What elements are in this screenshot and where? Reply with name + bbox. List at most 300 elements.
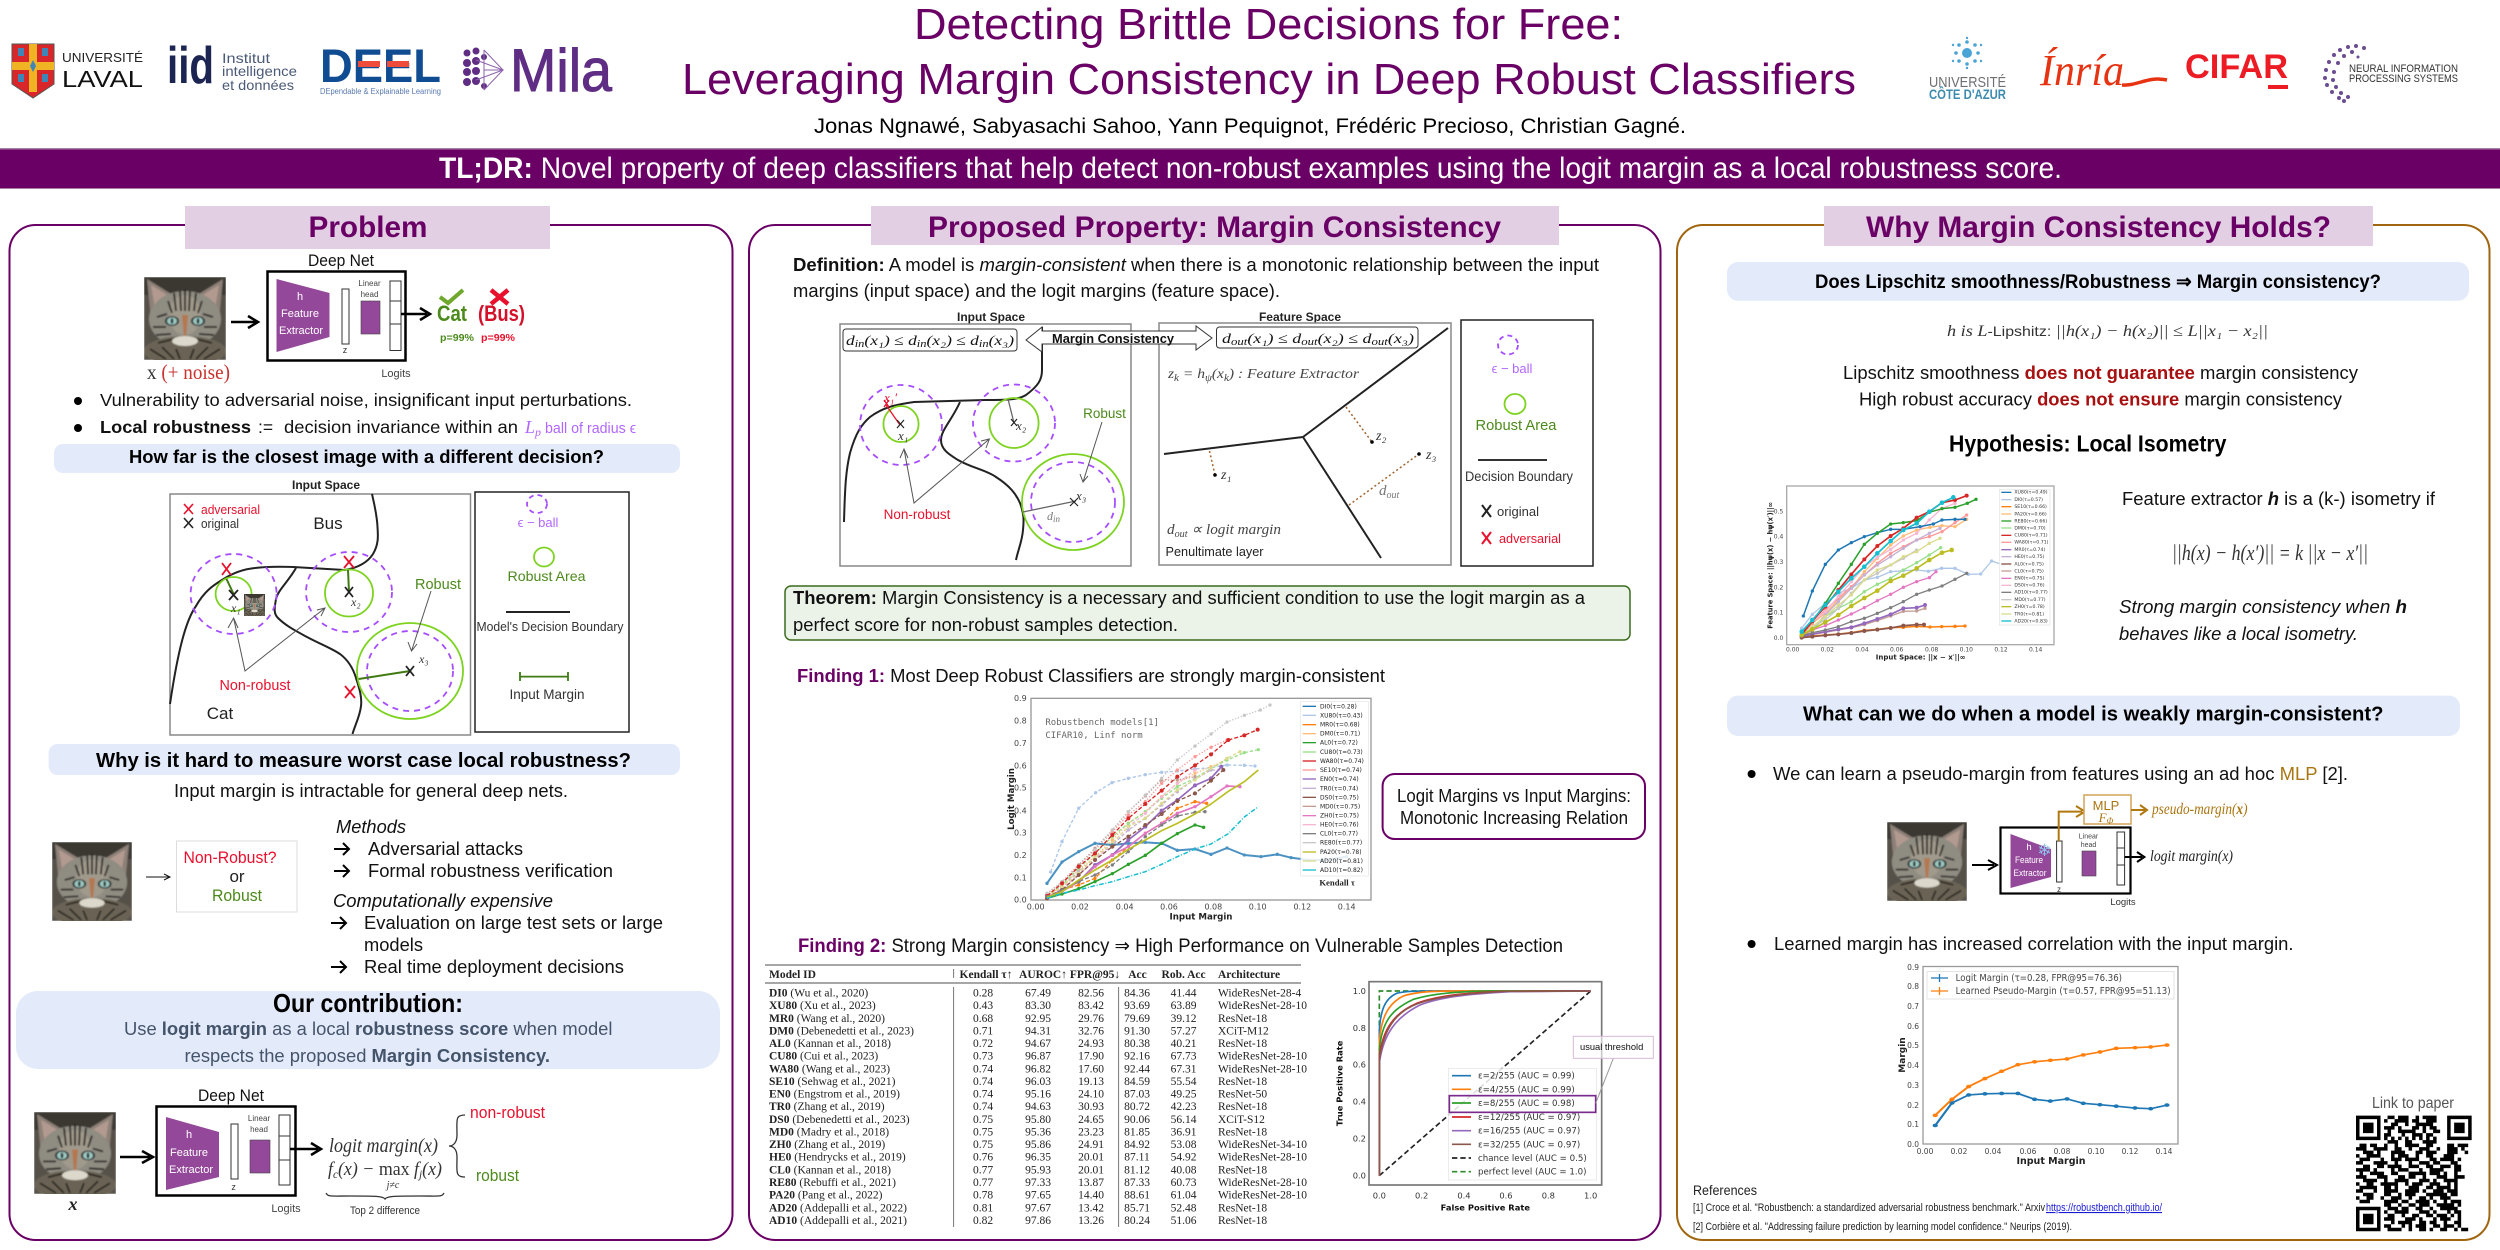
- icon: check: [440, 290, 463, 303]
- logo: Université Côte d'Azur: [1929, 37, 2006, 102]
- diagram: logit margin as score: (x): [422, 1159, 442, 1180]
- table rows: WideResNet-28-10: [1218, 1152, 1307, 1164]
- logo: Institut intelligence et données: iid: [167, 37, 214, 95]
- chart: learned pseudo-margin: Learned Pseudo-Margin (τ=0.57, FPR@95=51.13): [1956, 986, 2171, 997]
- box: non-robust or robust: Robust: [212, 886, 262, 905]
- table rows: 0.74: [973, 1076, 993, 1088]
- table rows: 92.95: [1025, 1013, 1051, 1025]
- diagram: feature space: out: [1175, 529, 1188, 540]
- table rows: RE80 (Rebuffi et al., 2021): [769, 1177, 896, 1189]
- diagram: pseudo-margin MLP: Extractor: [2014, 868, 2046, 879]
- image: noisy cat: [144, 277, 226, 366]
- chart: learned pseudo-margin: 0.9: [1907, 963, 1919, 972]
- callout: our contribution: [16, 988, 720, 1069]
- question pill: worst case: Why is it hard to measure worst case local robustness?: [96, 750, 631, 772]
- list: methods and costs: Formal robustness verification: [368, 861, 613, 881]
- diagram: input space: Input Space: [292, 478, 360, 492]
- heading: Why Margin Consistency Holds?: Why Margin Consistency Holds?: [1866, 211, 2331, 244]
- table rows: 57.27: [1171, 1025, 1197, 1037]
- table rows: 67.73: [1171, 1051, 1197, 1063]
- chart: logit margin vs input margin: HE0(τ=0.76): [1320, 822, 1359, 829]
- table header: FPR@95↓: [1070, 969, 1120, 981]
- image: cat: [52, 842, 132, 927]
- diagram: pseudo-margin MLP: head: [2081, 842, 2096, 849]
- chart: feature space vs input space: SE10(τ=0.66): [2014, 504, 2047, 510]
- chart: logit margin vs input margin: Robustbench models[1]: [1045, 718, 1159, 728]
- callout: monotonic relation: Logit Margins vs Input Margins:: [1397, 786, 1631, 806]
- diagram: pseudo-margin MLP: [1887, 795, 2248, 908]
- chart: feature space vs input space: 0.06: [1890, 646, 1904, 653]
- diagram: input space: Robust: [415, 577, 461, 593]
- table rows: AL0 (Kannan et al., 2018): [769, 1038, 891, 1050]
- diagram: pseudo-margin MLP: pseudo-margin(x): [2151, 801, 2248, 818]
- table rows: SE10 (Sehwag et al., 2021): [769, 1076, 896, 1088]
- table rows: 83.30: [1025, 1000, 1051, 1012]
- network box: Linear: [358, 279, 381, 288]
- diagram: logit margin as score: logit margin(x): [329, 1135, 438, 1157]
- references: [2] Corbière et al. "Addressing failure prediction by learning model confidence." Neurips (2019).: [1693, 1221, 2072, 1233]
- table rows: 20.01: [1078, 1152, 1104, 1164]
- table rows: 96.03: [1025, 1076, 1051, 1088]
- chart: feature space vs input space: AD20(τ=0.83): [2014, 618, 2048, 624]
- chart: ROC curves: 0.8: [1542, 1190, 1555, 1200]
- list: methods and costs: Real time deployment decisions: [364, 957, 624, 977]
- link to paper label: Link to paper: [2372, 1095, 2455, 1112]
- chart: ROC curves: usual threshold: [1580, 1042, 1643, 1052]
- table rows: 0.75: [973, 1126, 993, 1138]
- table rows: 91.30: [1124, 1025, 1150, 1037]
- chart: feature space vs input space: HE0(τ=0.75): [2014, 554, 2045, 560]
- chart: logit margin vs input margin: MD0(τ=0.75): [1320, 803, 1360, 810]
- logo: Université Côte d'Azur: CÔTE D'AZUR: [1929, 85, 2006, 102]
- table rows: MR0 (Wang et al., 2020): [769, 1013, 885, 1025]
- table rows: 36.91: [1171, 1126, 1197, 1138]
- table rows: DM0 (Debenedetti et al., 2023): [769, 1025, 914, 1037]
- diagram: feature space: ) : Feature Extractor: [1228, 367, 1360, 382]
- bullets: problem statement: :=: [258, 417, 273, 437]
- table rows: 0.82: [973, 1215, 993, 1227]
- diagram: deep net prediction with noise: Logits: [381, 368, 411, 380]
- diagram: feature space: Feature Space: [1259, 310, 1341, 324]
- chart: logit margin vs input margin: 0.0: [1014, 896, 1027, 905]
- chart: learned pseudo-margin: 0.02: [1951, 1147, 1968, 1156]
- question pill: closest image: [54, 444, 680, 473]
- chart: logit margin vs input margin: MR0(τ=0.68): [1320, 722, 1360, 729]
- chart: feature space vs input space: DS0(τ=0.76): [2014, 583, 2045, 589]
- table rows: 30.93: [1078, 1101, 1104, 1113]
- formula: output margins ordering: [1216, 327, 1418, 348]
- logo: Inria: Ínría: [2039, 46, 2124, 95]
- chart: ROC curves: perfect level (AUC = 1.0): [1478, 1168, 1587, 1178]
- box: non-robust or robust: or: [229, 867, 245, 886]
- text: isometry definition: behaves like a local isometry.: [2119, 623, 2358, 644]
- chart: logit margin vs input margin: 0.04: [1116, 902, 1134, 911]
- table rows: 0.75: [973, 1114, 993, 1126]
- legend: input space: Robust Area: [508, 568, 586, 584]
- references: [1693, 1182, 2163, 1233]
- legend: input space: Model's Decision Boundary: [476, 619, 624, 634]
- TL;DR banner: TL;DR: Novel property of deep classifiers that help detect non-robust examples using the logit margin as a local robustness score.: [439, 152, 2062, 185]
- title: Leveraging Margin Consistency in Deep Robust Classifiers: [682, 55, 1856, 104]
- table rows: 92.44: [1124, 1063, 1150, 1075]
- diagram: pseudo-margin MLP: logit margin(x): [2150, 848, 2233, 865]
- chart: logit margin vs input margin: 0.06: [1160, 902, 1178, 911]
- table rows: 0.75: [973, 1139, 993, 1151]
- diagram: feature space: z₁: [1220, 468, 1231, 483]
- panel: proposed property: [749, 206, 1660, 1240]
- table rows: ResNet-18: [1218, 1076, 1267, 1088]
- chart: ROC curves: 0.2: [1415, 1190, 1428, 1200]
- chart: ROC curves: ε=32/255 (AUC = 0.97): [1478, 1140, 1580, 1150]
- chart: learned pseudo-margin: 0.0: [1907, 1140, 1919, 1149]
- chart: logit margin vs input margin: 0.10: [1249, 902, 1267, 911]
- chart: feature space vs input space: 0.5: [1774, 508, 1784, 515]
- text: isometry definition: Feature extractor h is a (k-) isometry if: [2122, 488, 2436, 509]
- chart: feature space vs input space: ZH0(τ=0.78): [2014, 604, 2045, 610]
- diagram: input space: x₁′: [883, 390, 897, 405]
- table rows: 24.65: [1078, 1114, 1104, 1126]
- chart: feature space vs input space: 0.4: [1774, 534, 1784, 541]
- table rows: ResNet-18: [1218, 1164, 1267, 1176]
- logo: Institut intelligence et données: intelligence: [222, 63, 297, 79]
- chart: learned pseudo-margin: 0.8: [1907, 982, 1919, 991]
- table rows: 0.28: [973, 988, 993, 1000]
- chart: ROC curves: False Positive Rate: [1441, 1202, 1530, 1212]
- chart: ROC curves: 0.6: [1353, 1060, 1366, 1070]
- logo: Université Côte d'Azur: UNIVERSITÉ: [1929, 74, 2006, 91]
- diagram: deep net prediction with noise: Cat: [437, 301, 468, 326]
- table rows: 95.86: [1025, 1139, 1051, 1151]
- references: References: [1693, 1182, 1757, 1198]
- chart: feature space vs input space: 0.1: [1774, 610, 1784, 617]
- table rows: 53.08: [1171, 1139, 1197, 1151]
- bullets: problem statement: ball of radius ϵ: [545, 420, 636, 437]
- table rows: 80.72: [1124, 1101, 1150, 1113]
- chart: feature space vs input space: 0.3: [1774, 559, 1784, 566]
- chart: learned pseudo-margin: 0.04: [1985, 1147, 2002, 1156]
- chart: ROC curves: ε=4/255 (AUC = 0.99): [1478, 1085, 1575, 1095]
- diagram: feature space: [1159, 310, 1451, 565]
- chart: learned pseudo-margin: 0.4: [1907, 1061, 1919, 1070]
- chart: ROC curves: chance level (AUC = 0.5): [1478, 1154, 1587, 1164]
- chart: ROC curves: 0.4: [1353, 1097, 1366, 1107]
- diagram: deep net prediction with noise: Deep Net: [308, 251, 374, 270]
- logo: NeurIPS: [2323, 44, 2458, 103]
- chart: ROC curves: 0.2: [1353, 1134, 1366, 1144]
- chart: feature space vs input space: PA20(τ=0.66): [2014, 511, 2047, 517]
- chart: logit margin vs input margin: Logit Margin: [1007, 768, 1017, 830]
- diagram: input space: [170, 478, 470, 735]
- table rows: 40.08: [1171, 1164, 1197, 1176]
- diagram: input space: Input Space: [957, 310, 1025, 324]
- icon: cross: [491, 290, 508, 304]
- chart: learned pseudo-margin: Input Margin: [2016, 1156, 2086, 1167]
- chart: logit margin vs input margin: 0.12: [1293, 902, 1311, 911]
- chart: logit margin vs input margin: EN0(τ=0.74): [1320, 776, 1359, 783]
- arrow: cat to question: [146, 874, 170, 880]
- diagram: logit margin as score: c: [333, 1167, 339, 1181]
- diagram: feature space: z₂: [1375, 429, 1386, 444]
- diagram: input space: x₃: [418, 652, 428, 666]
- table rows: HE0 (Hendrycks et al., 2019): [769, 1152, 906, 1164]
- list: methods and costs: Computationally expensive: [333, 891, 553, 911]
- table rows: WA80 (Wang et al., 2023): [769, 1063, 890, 1075]
- diagram: deep net prediction with noise: p=99%: [481, 333, 515, 344]
- table rows: 52.48: [1171, 1202, 1197, 1214]
- chart: logit margin vs input margin: 0.02: [1071, 902, 1089, 911]
- chart: ROC curves: 1.0: [1353, 986, 1366, 996]
- chart: logit margin vs input margin: DS0(τ=0.75): [1320, 794, 1359, 801]
- table header: Architecture: [1218, 969, 1280, 981]
- diagram: pseudo-margin MLP: h: [2026, 842, 2032, 853]
- chart: logit margin vs input margin: 0.6: [1014, 761, 1027, 770]
- logo: Université Laval: [12, 44, 143, 98]
- chart: logit margin vs input margin: 0.00: [1027, 902, 1045, 911]
- finding 2 heading: Finding 2: Strong Margin consistency ⇒ High Performance on Vulnerable Samples Detection: [798, 936, 1563, 957]
- formula: input margins ordering: [843, 329, 1017, 351]
- chart: learned pseudo-margin: 0.12: [2122, 1147, 2139, 1156]
- table rows: 56.14: [1171, 1114, 1197, 1126]
- table rows: [769, 988, 1307, 1227]
- chart: logit margin vs input margin: 0.2: [1014, 851, 1027, 860]
- table rows: 80.24: [1124, 1215, 1150, 1227]
- chart: feature space vs input space: 0.00: [1786, 646, 1800, 653]
- diagram: input space: x₂: [1015, 418, 1027, 433]
- table rows: 0.78: [973, 1190, 993, 1202]
- chart: logit margin vs input margin: ZH0(τ=0.75): [1320, 813, 1359, 820]
- heading: Problem: [185, 206, 550, 249]
- formula: output margins ordering: out: [1231, 337, 1248, 348]
- formula: input margins ordering: in: [917, 339, 926, 350]
- references: https://robustbench.github.io/: [2046, 1202, 2163, 1214]
- diagram: feature space: d: [1167, 522, 1174, 538]
- legend: input space: Input Margin: [510, 686, 584, 702]
- definition text: [793, 255, 1599, 301]
- chart: feature space vs input space: 0.04: [1855, 646, 1869, 653]
- arrows to labels: [228, 591, 431, 671]
- arrow: input to net: [231, 316, 258, 328]
- table rows: WideResNet-28-4: [1218, 988, 1301, 1000]
- diagram: deep net prediction with noise: p=99%: [440, 333, 474, 344]
- table rows: WideResNet-34-10: [1218, 1139, 1307, 1151]
- diagram: deep net prediction with noise: [144, 251, 525, 384]
- chart: learned pseudo-margin: [1898, 963, 2178, 1167]
- callout: monotonic relation: [1383, 774, 1645, 839]
- TL;DR banner: [0, 148, 2500, 189]
- table rows: 81.12: [1124, 1164, 1150, 1176]
- chart: logit margin vs input margin: CL0(τ=0.77): [1320, 831, 1358, 838]
- network box: Extractor: [279, 325, 323, 337]
- chart: logit margin vs input margin: CU80(τ=0.73): [1320, 749, 1363, 756]
- box: non-robust or robust: Non-Robust?: [184, 848, 276, 867]
- chart: feature space vs input space: WA80(τ=0.71): [2014, 540, 2049, 546]
- chart: feature space vs input space: XU80(τ=0.49): [2014, 490, 2048, 496]
- chart: learned pseudo-margin: 0.3: [1907, 1081, 1919, 1090]
- diagram: logit margin as score: Linear: [248, 1114, 270, 1123]
- box: non-robust or robust: [176, 841, 297, 912]
- chart: logit margin vs input margin: AD20(τ=0.81): [1320, 858, 1363, 865]
- diagram: logit margin as score: max f: [379, 1159, 420, 1180]
- theorem box: perfect score for non-robust samples detection.: [793, 615, 1178, 635]
- chart: logit margin vs input margin: 0.8: [1014, 716, 1027, 725]
- table rows: 92.16: [1124, 1051, 1150, 1063]
- chart: logit margin vs input margin: 0.5: [1014, 784, 1027, 793]
- legend: margin consistency: [1461, 320, 1593, 566]
- network box: z: [343, 345, 348, 355]
- chart: feature space vs input space: 0.12: [1994, 646, 2008, 653]
- table header: AUROC↑: [1019, 969, 1067, 981]
- formula: output margins ordering: (x₁) ≤ d: [1247, 332, 1303, 347]
- chart: feature space vs input space: Feature Space: ||hψ(x) − hψ(x′)||∞: [1767, 502, 1776, 629]
- text: isometry definition: ||h(x) − h(x′)|| = k ||x − x′||: [2172, 540, 2368, 565]
- table rows: ResNet-18: [1218, 1202, 1267, 1214]
- chart: learned pseudo-margin: 0.7: [1907, 1002, 1919, 1011]
- table rows: 41.44: [1171, 988, 1197, 1000]
- crosses: [229, 587, 414, 676]
- diagram: pseudo-margin MLP: z: [2057, 885, 2061, 894]
- table rows: 85.71: [1124, 1202, 1150, 1214]
- chart: logit margin vs input margin: DI0(τ=0.28): [1320, 703, 1357, 710]
- table rows: 17.90: [1078, 1051, 1104, 1063]
- chart: feature space vs input space: 0.08: [1925, 646, 1939, 653]
- bullets: problem statement: Vulnerability to adversarial noise, insignificant input perturbations.: [100, 390, 632, 410]
- table rows: 42.23: [1171, 1101, 1197, 1113]
- list: methods and costs: Adversarial attacks: [368, 839, 523, 859]
- diagram: pseudo-margin MLP: MLP: [2093, 798, 2119, 813]
- diagram: logit margin as score: j: [417, 1167, 423, 1181]
- logo: NeurIPS: NEURAL INFORMATION: [2349, 63, 2458, 75]
- text: Lipschitz findings: High robust accuracy does not ensure margin consistency: [1859, 389, 2343, 410]
- diagram: input space: d: [1047, 509, 1053, 523]
- diagram: logit margin as score: z: [231, 1182, 236, 1192]
- diagram: feature space: z₃: [1425, 448, 1436, 463]
- chart: learned pseudo-margin: 0.5: [1907, 1041, 1919, 1050]
- chart: learned pseudo-margin: 0.6: [1907, 1022, 1919, 1031]
- table: model results: [765, 965, 1307, 1227]
- chart: feature space vs input space: Input Space: ||x − x′||∞: [1876, 653, 1966, 662]
- chart: feature space vs input space: CU80(τ=0.71): [2014, 533, 2048, 539]
- chart: logit margin vs input margin: Input Margin: [1170, 913, 1232, 923]
- chart: logit margin vs input margin: AD10(τ=0.82): [1320, 867, 1363, 874]
- table rows: WideResNet-28-10: [1218, 1063, 1307, 1075]
- list: methods and costs: Evaluation on large test sets or large: [364, 913, 663, 933]
- chart: logit margin vs input margin: WA80(τ=0.74): [1320, 758, 1364, 765]
- table rows: 13.26: [1078, 1215, 1104, 1227]
- diagram: feature space: ψ: [1205, 373, 1213, 384]
- epsilon balls: [191, 552, 463, 719]
- chart: feature space vs input space: [1767, 486, 2054, 662]
- table rows: 0.68: [973, 1013, 993, 1025]
- table rows: 95.16: [1025, 1089, 1051, 1101]
- table rows: EN0 (Engstrom et al., 2019): [769, 1089, 900, 1101]
- diagram: logit margin as score: Top 2 difference: [350, 1205, 420, 1217]
- table rows: 13.87: [1078, 1177, 1104, 1189]
- table rows: 67.49: [1025, 988, 1051, 1000]
- table rows: 63.89: [1171, 1000, 1197, 1012]
- table rows: ResNet-18: [1218, 1126, 1267, 1138]
- bullets: problem statement: decision invariance within an: [284, 417, 518, 437]
- table rows: 0.76: [973, 1152, 993, 1164]
- chart: feature space vs input space: MD0(τ=0.77): [2014, 597, 2046, 603]
- table rows: 14.40: [1078, 1190, 1104, 1202]
- diagram: logit margin as score: robust: [476, 1166, 519, 1185]
- diagram: input space: original: [201, 517, 239, 531]
- diagram: input space: x₂: [350, 595, 360, 609]
- table rows: 55.54: [1171, 1076, 1197, 1088]
- table header: Model ID: [769, 969, 816, 981]
- legend: margin consistency: original: [1497, 504, 1539, 519]
- table rows: ResNet-18: [1218, 1038, 1267, 1050]
- table rows: DI0 (Wu et al., 2020): [769, 988, 868, 1000]
- table rows: 17.60: [1078, 1063, 1104, 1075]
- diagram: logit margin as score: (x) −: [338, 1159, 379, 1180]
- table rows: DS0 (Debenedetti et al., 2023): [769, 1114, 910, 1126]
- diagram: pseudo-margin MLP: F: [2099, 810, 2107, 825]
- legend: input space: ϵ − ball: [518, 515, 559, 530]
- logo: Institut intelligence et données: [167, 37, 297, 95]
- logo: Inria: [2039, 46, 2167, 95]
- list: methods and costs: Methods: [336, 817, 406, 837]
- table rows: ResNet-18: [1218, 1215, 1267, 1227]
- chart: ROC curves: True Positive Rate: [1335, 1040, 1345, 1126]
- diagram: logit margin as score: Logits: [271, 1203, 301, 1215]
- logo: CIFAR: CIFAR: [2185, 48, 2288, 86]
- chart: feature space vs input space: AL0(τ=0.75): [2014, 561, 2044, 567]
- diagram: input space: [840, 310, 1131, 566]
- chart: logit margin vs input margin: 0.3: [1014, 829, 1027, 838]
- text: Lipschitz findings: Lipschitz smoothness does not guarantee margin consistency: [1843, 362, 2359, 383]
- chart: feature space vs input space: 0.14: [2029, 646, 2043, 653]
- theorem box: Theorem: Margin Consistency is a necessary and sufficient condition to use the logit margin as a: [793, 588, 1586, 608]
- legend: margin consistency: Robust Area: [1476, 418, 1557, 434]
- table rows: 13.42: [1078, 1202, 1104, 1214]
- table rows: 95.80: [1025, 1114, 1051, 1126]
- diagram: pseudo-margin MLP: Φ: [2107, 816, 2114, 826]
- text: isometry definition: [2119, 488, 2436, 644]
- chart: feature space vs input space: DM0(τ=0.70): [2014, 525, 2046, 531]
- callout: our contribution: Our contribution:: [273, 988, 463, 1018]
- diagram: pseudo-margin MLP: Logits: [2110, 897, 2136, 908]
- table rows: 0.77: [973, 1177, 993, 1189]
- table rows: 0.77: [973, 1164, 993, 1176]
- table rows: 39.12: [1171, 1013, 1197, 1025]
- chart: logit margin vs input margin: TR0(τ=0.74): [1319, 785, 1358, 792]
- chart: learned pseudo-margin: Logit Margin (τ=0.28, FPR@95=76.36): [1956, 973, 2122, 984]
- table rows: 87.33: [1124, 1177, 1150, 1189]
- chart: ROC curves: 0.8: [1353, 1023, 1366, 1033]
- diagram: input space: x₃: [1075, 488, 1086, 503]
- table rows: ResNet-18: [1218, 1013, 1267, 1025]
- title: Detecting Brittle Decisions for Free:: [914, 0, 1623, 49]
- table rows: AD10 (Addepalli et al., 2021): [769, 1215, 907, 1227]
- chart: learned pseudo-margin: 0.2: [1907, 1101, 1919, 1110]
- table rows: ResNet-50: [1218, 1089, 1267, 1101]
- chart: logit margin vs input margin: SE10(τ=0.74): [1320, 767, 1362, 774]
- table rows: 0.74: [973, 1063, 993, 1075]
- list: methods and costs: models: [364, 935, 423, 955]
- table rows: 96.35: [1025, 1152, 1051, 1164]
- diagram: feature space: Penultimate layer: [1166, 544, 1264, 559]
- table rows: WideResNet-28-10: [1218, 1177, 1307, 1189]
- table rows: WideResNet-28-10: [1218, 1000, 1307, 1012]
- diagram: feature space: (x: [1212, 367, 1225, 382]
- diagram: logit margin as score: f: [328, 1159, 333, 1180]
- bullets: problem statement: p: [534, 425, 541, 439]
- diagram: logit margin as score: [34, 1086, 545, 1217]
- bullets: problem statement: Local robustness: [100, 417, 251, 437]
- diagram: feature space: k: [1224, 373, 1230, 384]
- bullet: correlation: Learned margin has increased correlation with the input margin.: [1774, 933, 2294, 954]
